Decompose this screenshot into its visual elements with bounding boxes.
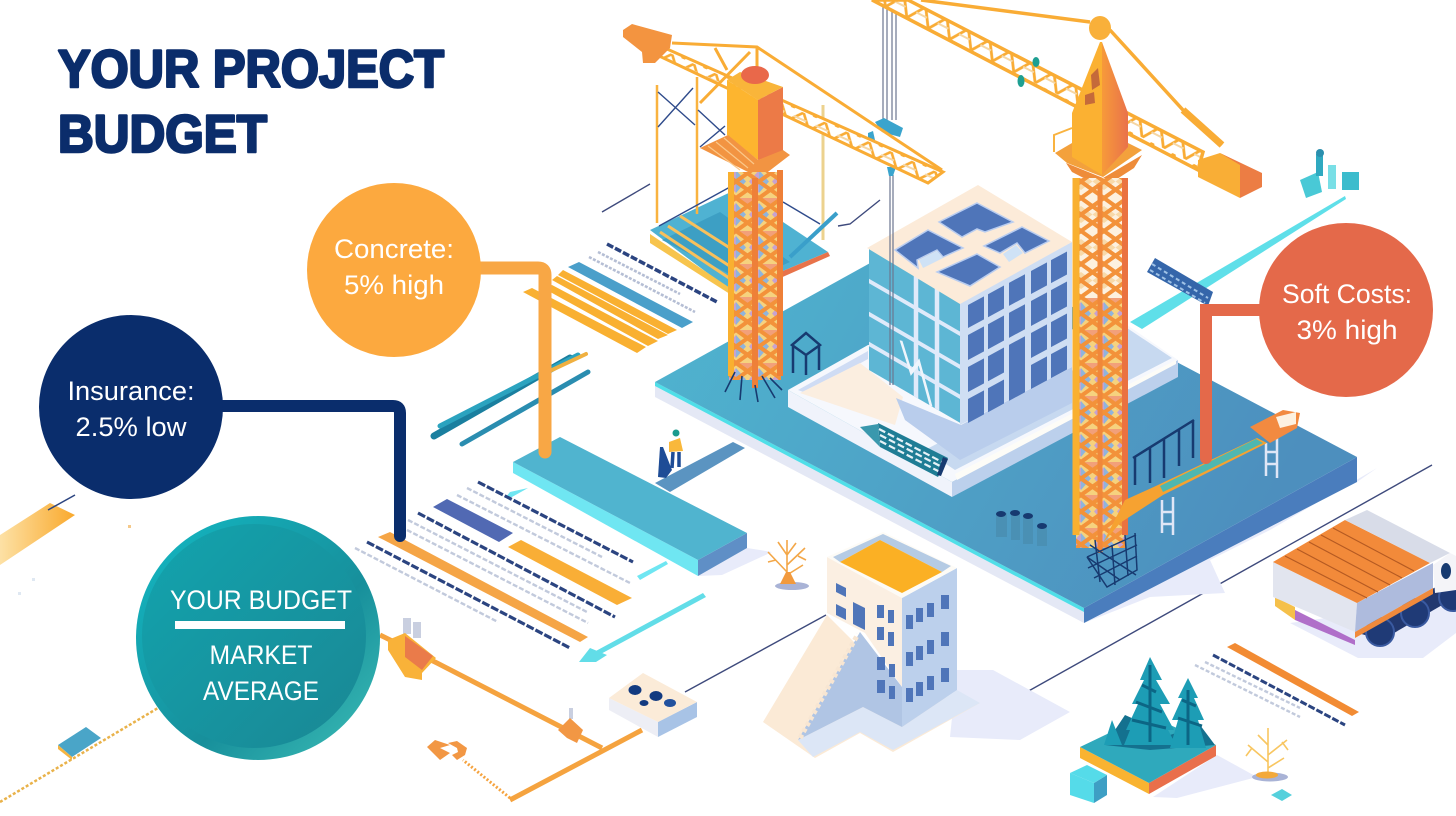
main building [867,185,1072,425]
trees [1105,715,1215,750]
building right window face [960,242,1072,425]
callout: concrete: Concrete: [334,234,454,264]
left crane foundation [725,372,782,402]
blue lattice bar [1147,258,1213,306]
right crane rebar foundation [1087,533,1137,587]
conveyor ramp [1103,410,1300,543]
cyan arrow [579,593,706,662]
title: BUDGET [58,105,267,164]
gibberish heading line [607,244,717,302]
building roof [827,532,957,598]
title [58,40,444,164]
thin isometric connector lines [602,184,1432,707]
left crane lattice tower [729,172,755,380]
callout: insurance: Insurance: [68,376,194,406]
callout: soft costs [1259,223,1433,397]
connector plug large [388,618,436,680]
cyan cube [1070,773,1094,803]
scaffold stand [792,333,820,375]
small apartment building [763,532,980,758]
right crane jib [872,0,1203,170]
golden bush [1246,728,1288,782]
building windows [836,583,949,702]
insurance and budget text panel [355,482,633,648]
callout: insurance: 2.5% low [76,412,187,442]
connector plug small [558,708,583,743]
hoist cables and hook [868,0,903,385]
building faces [827,557,902,687]
legend circle: your budget vs market average [136,516,380,760]
building roof [867,185,1072,304]
scaffold behind left crane [650,77,837,298]
lavender shadows [698,468,1456,798]
left dashed wire with tile [0,708,158,802]
right crane spire cab [1072,42,1102,175]
left decorative wedge [0,495,131,595]
left crane jib [657,45,943,183]
callout: insurance [39,315,223,499]
title: YOUR PROJECT [58,40,444,99]
truck with orange load [1273,510,1456,646]
right crane platform [1054,128,1072,152]
legend circle: your budget vs market average: AVERAGE [203,676,319,706]
building left glass face [869,248,961,423]
control box [609,673,697,737]
callout: soft costs: 3% high [1296,315,1398,345]
connector: concrete leader [478,268,545,452]
cyan diamond tile [1271,789,1292,801]
construction platform [655,231,1357,623]
connector: insurance leader [218,406,400,536]
orange circuit wires [380,635,642,800]
connector: soft costs leader [1206,310,1265,458]
right crane lattice tower [1076,178,1102,298]
icon: cyan data blocks [1300,149,1359,198]
left crane cab [727,80,758,160]
concrete text panel [523,244,717,353]
right tower crane [872,0,1262,587]
callout: concrete: 5% high [344,270,444,300]
pipes [434,354,588,444]
cyan conduit line [1130,196,1346,329]
chain link icon [427,740,467,760]
right crane green clamps [1032,57,1040,67]
left crane counterweight [623,24,672,63]
legend circle: your budget vs market average: MARKET [210,640,312,670]
callout: concrete [307,183,481,357]
walkway slab [505,437,747,580]
tree island [1070,657,1216,803]
small bush [768,540,809,590]
worker figure [658,430,683,478]
left tower crane [623,24,943,402]
right crane counterweight [1198,153,1240,198]
building plinth [788,325,1178,497]
platform props: barrels and fence [996,420,1194,546]
building base [763,615,980,758]
rebar bundle [860,423,948,477]
right text panel [1195,643,1359,725]
legend circle: your budget vs market average: YOUR BUDGET [170,585,352,615]
callout: soft costs: Soft Costs: [1282,279,1412,309]
